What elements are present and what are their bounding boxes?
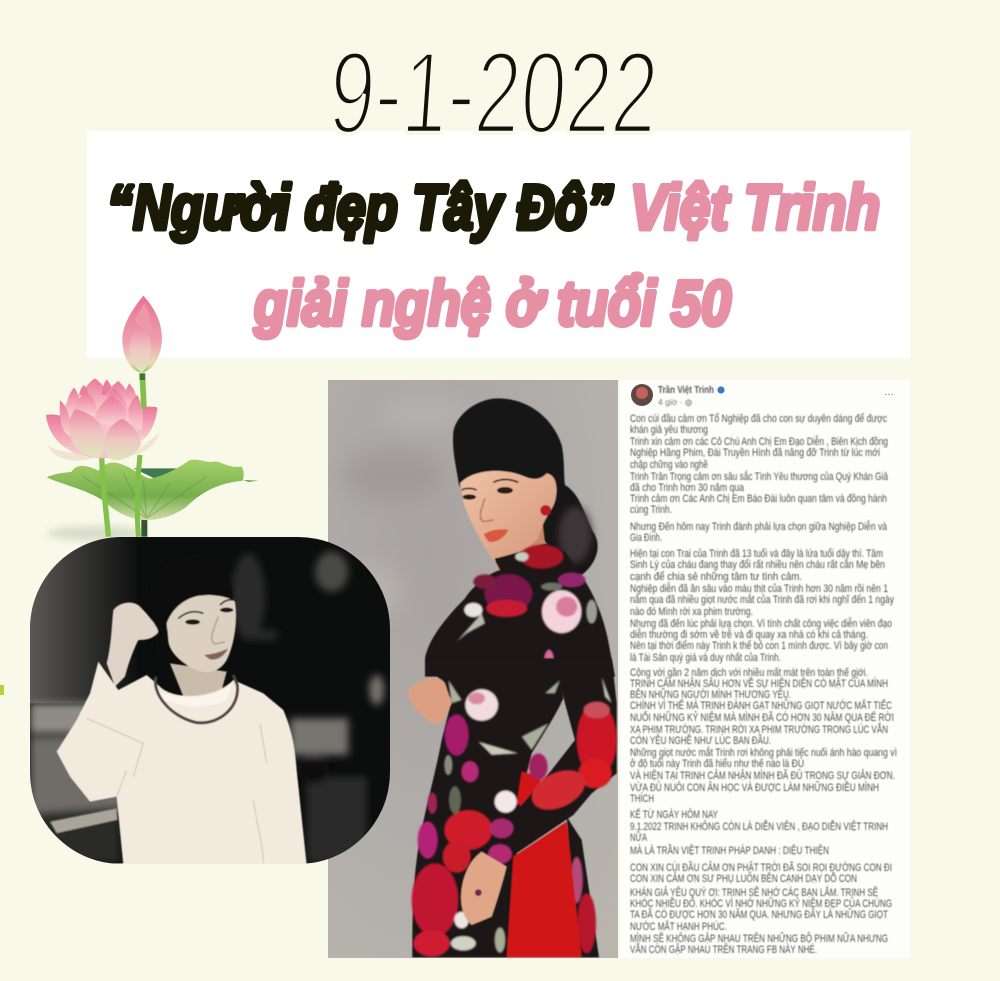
post body text: NUỐI NHỮNG KỶ NIỆM MÀ MÌNH ĐÃ CÓ HƠN 30 NĂM QUA ĐỂ RỜI [630, 710, 894, 724]
post body text: KHÁN GIẢ YÊU QUÝ ƠI: TRINH SẼ NHỚ CÁC BẠN LẮM. TRINH SẼ [630, 886, 878, 899]
post body text: cạnh để chia sẻ những tâm tư tình cảm. [630, 571, 802, 583]
date title: 9-1-2022 [325, 27, 662, 158]
post body text: diễn thường đi sớm về trễ và đi quay xa nhà có khi cả tháng. [630, 628, 868, 641]
options dots: ··· [884, 389, 894, 400]
post body text: Trinh cảm ơn Các Anh Chị Em Báo Đài luôn quan tâm và đồng hành [630, 493, 887, 505]
post body text: Trinh Trân Trọng cảm ơn sâu sắc Tình Yêu thương của Quý Khán Giả [630, 470, 888, 483]
post body text: cùng Trinh. [630, 504, 672, 516]
photo: portrait in floral ao dai [328, 380, 618, 958]
post body text: CON XIN CÚI ĐẦU CẢM ƠN PHẬT TRỜI ĐÃ SOI RỌI ĐƯỜNG CON ĐI [630, 861, 892, 874]
post body text: CÒN YÊU NGHỀ NHƯ LÚC BAN ĐẦU. [630, 734, 771, 747]
post body text: Hiện tại con Trai của Trinh đã 13 tuổi và đây là lứa tuổi dậy thì. Tâm [630, 548, 883, 560]
headline line 1 dark: “Người đẹp Tây Đô” [107, 173, 613, 243]
post body text: Trinh xin cảm ơn các Cô Chú Anh Chị Em Đạo Diễn , Biên Kịch đồng [630, 435, 888, 448]
post body text: MÀ LÀ TRẦN VIỆT TRINH PHÁP DANH : DIỆU THIỆN [630, 844, 829, 857]
post body text: đã cho Trinh hơn 30 năm qua [630, 482, 744, 494]
post card [620, 380, 910, 958]
post body text: TA ĐÃ CÓ ĐƯỢC HƠN 30 NĂM QUA. NHƯNG ĐÂY LÀ NHỮNG GIỌT [630, 908, 888, 921]
post body text: Nên tại thời điểm này Trinh k thể bỏ con 1 mình được. Vì bây giờ con [630, 640, 888, 652]
post body text: Nhưng Đến hôm nay Trinh đành phải lựa chọn giữa Nghiệp Diễn và [630, 520, 887, 533]
post body text: THÍCH [630, 792, 654, 805]
post body text: Những giọt nước mắt Trinh rơi không phải tiếc nuối ánh hào quang vì [630, 746, 897, 759]
post body text: TRINH CẢM NHẬN SÂU HƠN VỀ SỰ HIỆN DIỆN CÓ MẶT CỦA MÌNH [630, 677, 888, 690]
photo backdrop [328, 380, 618, 958]
woman figure [57, 553, 307, 865]
headline [107, 173, 880, 339]
post body text: Gia Đình. [630, 532, 662, 544]
icon: lotus plant [46, 296, 258, 541]
verified badge [717, 386, 725, 394]
post body text: VÀ HIỆN TẠI TRINH CẢM NHẬN MÌNH ĐÃ ĐỦ TRONG SỰ GIẢN ĐƠN. [630, 769, 895, 782]
post body text: Nghiệp diễn đã ăn sâu vào máu thịt của Trinh hơn 30 năm rồi nên 1 [630, 582, 888, 595]
facebook post screenshot [620, 380, 910, 958]
figure lower body [408, 658, 617, 957]
post body text: chập chững vào nghề [630, 459, 708, 471]
figure upper body [425, 398, 615, 677]
photo dark background [30, 537, 390, 863]
timestamp: 4 giờ · ◍ [658, 397, 693, 407]
post body text: KỂ TỪ NGÀY HÔM NAY [630, 808, 718, 821]
post body text: khán giả yêu thương [630, 424, 708, 436]
post body text: NỮA [630, 831, 648, 844]
post body text: VẪN CÒN GẶP NHAU TRÊN TRANG FB NÀY NHÉ. [630, 943, 817, 956]
post body text: CHÍNH VÌ THẾ MÀ TRINH ĐÀNH GẠT NHỮNG GIỌT NƯỚC MẮT TIẾC [630, 699, 892, 712]
white headline banner [87, 131, 910, 358]
author name: Trần Việt Trinh [658, 384, 714, 396]
post body text: 9.1.2022 TRINH KHÔNG CÒN LÀ DIỄN VIÊN , ĐẠO DIỄN VIỆT TRINH [630, 820, 888, 833]
post body text: VỪA ĐỦ NUÔI CON ĂN HỌC VÀ ĐƯỢC LÀM NHỮNG ĐIỀU MÌNH [630, 781, 879, 794]
headline line 2 pink: giải nghệ ở tuổi 50 [253, 269, 731, 339]
post body text: là Tài Sản quý giá và duy nhất của Trinh. [630, 652, 781, 664]
photo: black and white portrait [30, 537, 390, 865]
post body text: NƯỚC MẮT HẠNH PHÚC. [630, 920, 727, 933]
post body text: nào đó Mình rời xa phim trường. [630, 606, 753, 618]
post body text: ở độ tuổi này Trinh đã hiểu như thế nào là ĐỦ [630, 757, 804, 770]
post body text: XA PHIM TRƯỜNG. TRINH RỜI XA PHIM TRƯỜNG TRONG LÚC VẪN [630, 723, 888, 736]
post body text [630, 413, 897, 956]
post body text: MÌNH SẼ KHÔNG GẶP NHAU TRÊN NHỮNG BỘ PHIM NỮA NHƯNG [630, 932, 888, 945]
post body text: năm qua đã nhiều giọt nước mắt của Trinh đã rơi khi nghĩ đến 1 ngày [630, 593, 894, 606]
post body text: CON XIN CẢM ƠN SƯ PHỤ LUÔN BÊN CẠNH DẠY DỖ CON [630, 872, 857, 885]
post body text: KHÓC NHIỀU ĐÓ. KHÓC VÌ NHỚ NHỮNG KỶ NIỆM ĐẸP CỦA CHÚNG [630, 897, 892, 910]
post body text: Nghiệp Hãng Phim, Đài Truyền Hình đã nâng đỡ Trinh từ lúc mới [630, 447, 880, 459]
post body text: Sinh Lý của cháu đang thay đổi rất nhiều nên cháu rất cần Mẹ bên [630, 559, 885, 571]
avatar [631, 384, 653, 406]
post body text: BÊN NHỮNG NGƯỜI MÌNH THƯƠNG YÊU. [630, 688, 791, 701]
post body text: Nhưng đã đến lúc phải lựa chọn. Vì tính chất công việc diễn viên đạo [630, 617, 892, 630]
small green edge mark [0, 685, 4, 695]
headline line 1 pink: Việt Trinh [630, 173, 880, 243]
post body text: Con cúi đầu cảm ơn Tổ Nghiệp đã cho con sự duyên dáng để được [630, 413, 887, 425]
post body text: Cộng với gần 2 năm dịch với nhiều mất mát trên toàn thế giới. [630, 667, 868, 679]
